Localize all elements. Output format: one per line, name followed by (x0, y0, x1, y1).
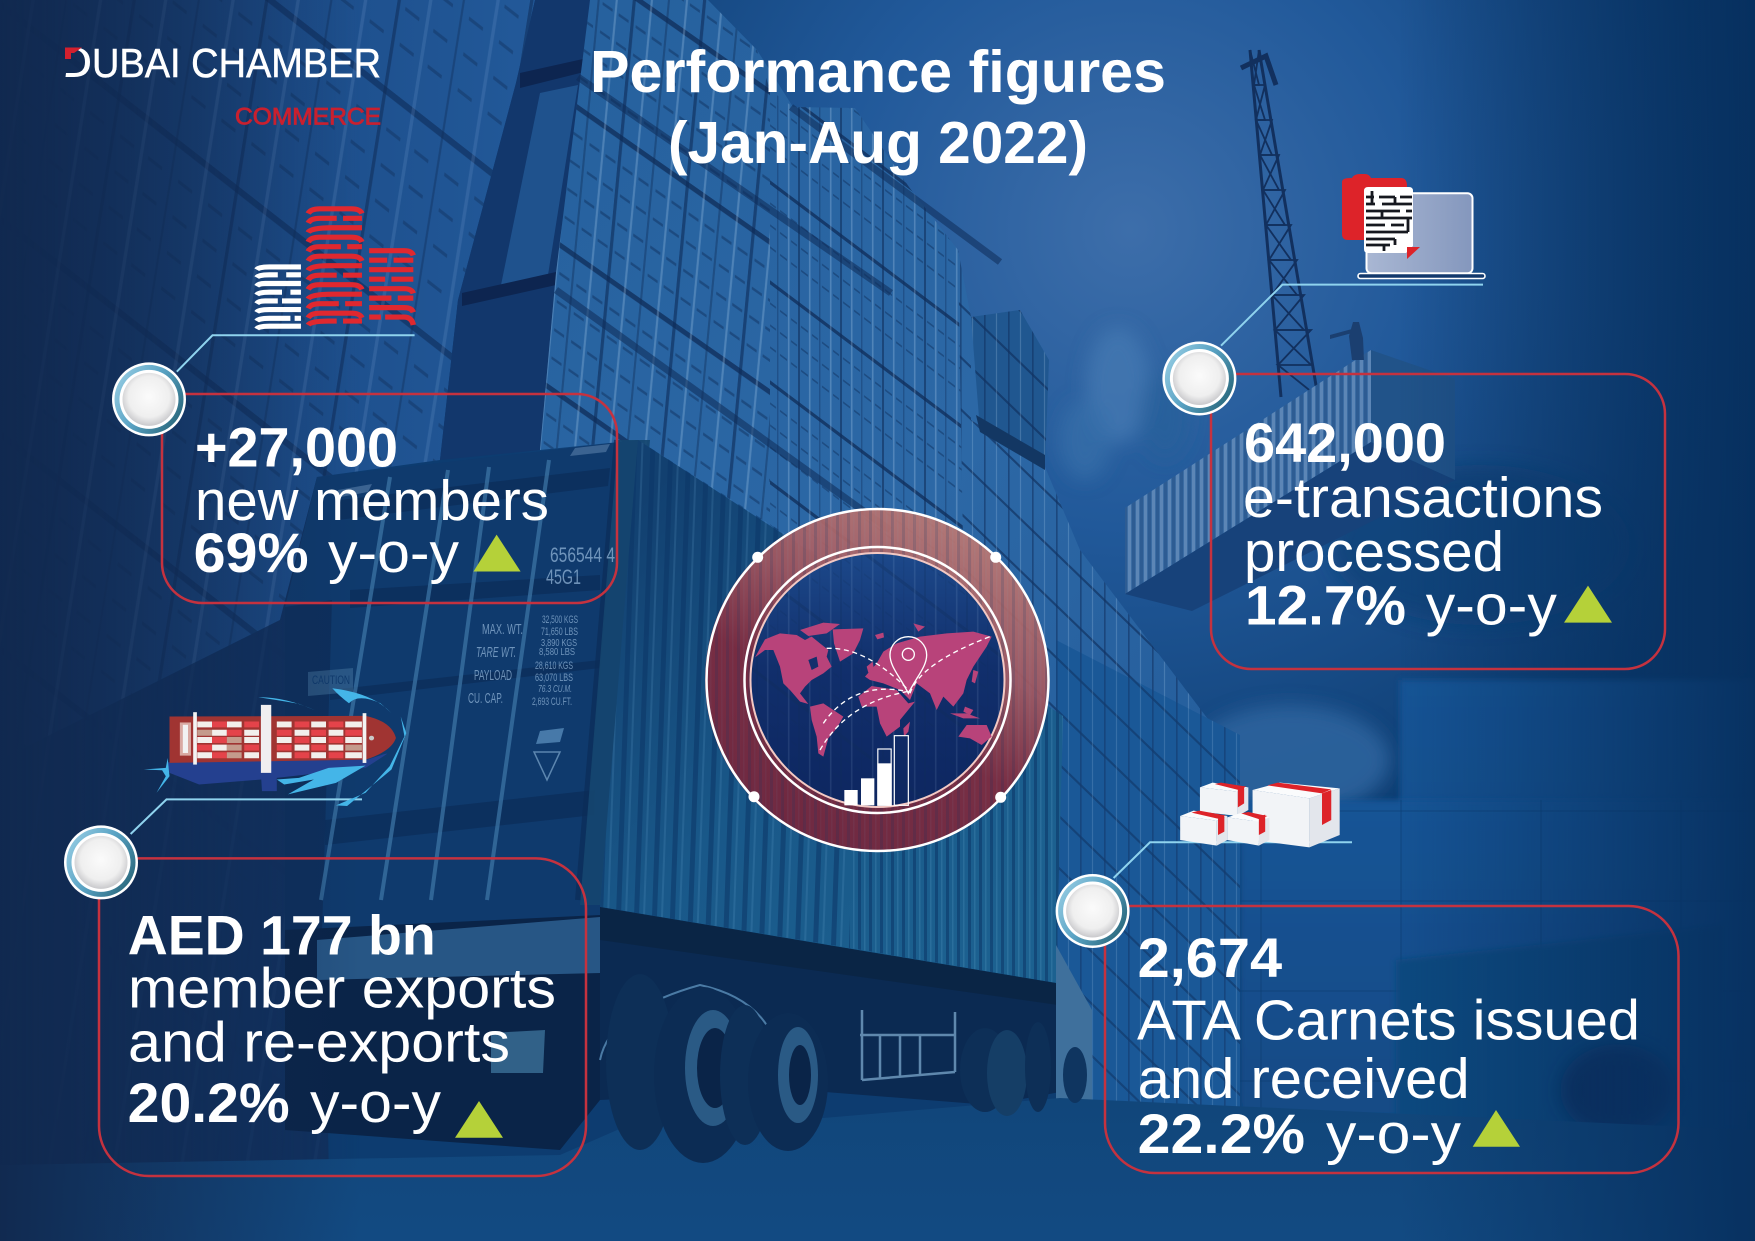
wheels (606, 974, 1087, 1163)
growth: 20.2% (128, 1071, 290, 1134)
label: e-transactions (1243, 466, 1603, 530)
container stencil text: 63,070 LBS (535, 672, 573, 684)
marker dot (1162, 342, 1236, 416)
logo: Dubai Chamber Commerce (65, 40, 381, 130)
badge inner disk (750, 553, 1004, 807)
icon: container ship (144, 688, 406, 806)
container stencil text: CU. CAP. (468, 690, 503, 707)
trailer rear doors (285, 440, 650, 1000)
growth: y-o-y (328, 521, 460, 585)
container stencil text: 76.3 CU.M. (538, 684, 572, 695)
left stack of containers (0, 0, 592, 760)
container stencil text: 71,650 LBS (541, 626, 578, 638)
label (1137, 988, 1640, 1111)
lower left dark containers (0, 477, 330, 1241)
central globe badge (705, 508, 1049, 852)
badge ring (705, 508, 1049, 852)
label: processed (1244, 520, 1504, 584)
mini bar chart (844, 736, 908, 805)
label: ATA Carnets issued (1137, 988, 1640, 1052)
container stencil text: MAX. WT. (482, 621, 523, 638)
distant containers right (1240, 680, 1755, 1241)
growth (1245, 574, 1557, 638)
card outline (1105, 906, 1678, 1173)
trailer side (600, 440, 1063, 983)
growth (1138, 1102, 1462, 1166)
growth: y-o-y (1426, 574, 1557, 638)
world map (755, 623, 992, 805)
growth: y-o-y (310, 1071, 442, 1135)
connector line (131, 799, 362, 834)
icon: boxes (1180, 783, 1340, 847)
metric: 642,000 (1244, 411, 1446, 474)
growth: 22.2% (1138, 1102, 1305, 1165)
panel: ATA Carnets (1056, 783, 1678, 1173)
icon: up triangle (474, 535, 521, 572)
container stencil text: 656544 4 (550, 544, 615, 567)
label (128, 956, 556, 1074)
growth: 69% (194, 521, 309, 584)
title (590, 39, 1166, 176)
title: Performance figures (590, 39, 1166, 105)
growth (194, 521, 460, 585)
container stencil text: 32,500 KGS (542, 614, 578, 626)
title: (Jan-Aug 2022) (668, 110, 1088, 176)
connector line (1114, 842, 1352, 878)
logo: Dubai Chamber Commerce: COMMERCE (235, 104, 381, 130)
container stencil text: 8,580 LBS (539, 647, 575, 658)
icon: up triangle (1564, 586, 1612, 623)
hanging container (1125, 322, 1455, 611)
growth: y-o-y (1326, 1102, 1462, 1166)
card outline (1211, 374, 1665, 669)
marker dot (112, 362, 186, 436)
far stacks beside cab (1056, 640, 1240, 1110)
container stencil text: 2,693 CU.FT. (532, 696, 572, 708)
crane (1241, 50, 1318, 397)
growth (128, 1071, 442, 1135)
metric: 2,674 (1138, 926, 1282, 989)
icon: laptop with document (1342, 174, 1485, 278)
container stencil text: 3,890 KGS (541, 638, 577, 649)
central stack of containers (540, 0, 1220, 900)
label: and received (1138, 1047, 1470, 1111)
ground (0, 1098, 1755, 1241)
clouds (1059, 327, 1630, 815)
connector line (177, 335, 415, 372)
metric: AED 177 bn (128, 904, 436, 967)
marker dot (64, 825, 138, 899)
container stencil text: 45G1 (546, 566, 581, 589)
icon: up triangle (455, 1101, 503, 1138)
container stencil text: TARE WT. (476, 644, 516, 661)
location pin (890, 637, 927, 693)
container stencil text: PAYLOAD (474, 667, 512, 684)
card outline (99, 858, 586, 1176)
connector line (1221, 285, 1483, 346)
growth: 12.7% (1245, 574, 1406, 637)
panel: member exports (64, 688, 586, 1176)
vignettes (0, 0, 360, 1241)
logo: Dubai Chamber Commerce: UBAI CHAMBER (92, 40, 381, 86)
icon: up triangle (1473, 1110, 1520, 1147)
marker dot (1056, 874, 1130, 948)
label: member exports (128, 956, 556, 1020)
panel: new members (112, 209, 617, 603)
label (1243, 466, 1603, 584)
metric: +27,000 (195, 416, 398, 479)
trailer rear doors: CAUTION (312, 673, 350, 687)
label: and re-exports (128, 1010, 510, 1074)
chassis and underside (285, 907, 1092, 1150)
panel: e-transactions (1162, 174, 1665, 669)
label: new members (195, 469, 549, 533)
flight paths (820, 637, 990, 750)
card outline (162, 394, 617, 603)
icon: buildings (257, 209, 413, 329)
container stencil text (468, 544, 615, 708)
container stencil text: 28,610 KGS (535, 660, 573, 672)
